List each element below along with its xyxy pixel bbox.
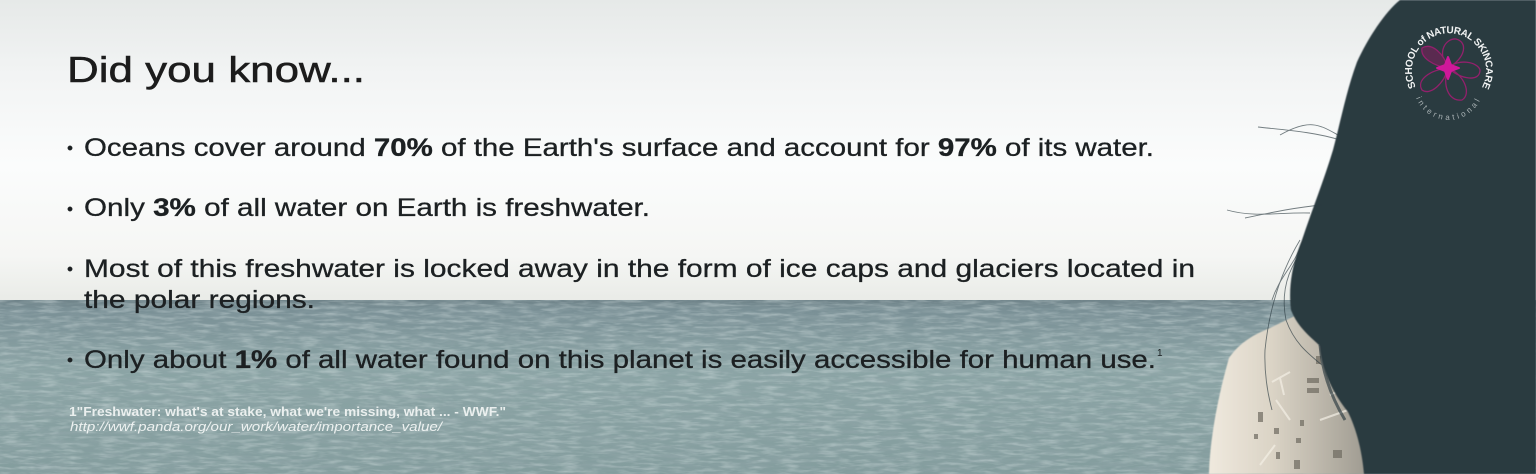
background: sea — [0, 300, 1536, 474]
bullet 3: the polar regions. — [84, 286, 315, 314]
footnote url: http://wwf.panda.org/our_work/water/importance_value/ — [70, 419, 444, 434]
hair — [1290, 0, 1536, 474]
logo international text: international — [1416, 96, 1480, 120]
stray hair strands — [1227, 125, 1345, 420]
bullet 4: Only about 1% of all water found on this planet is easily accessible for human use. — [84, 346, 1156, 374]
bullet 3 — [68, 255, 1195, 314]
title: Did you know... — [67, 49, 365, 90]
logo ring text: SCHOOL of NATURAL SKINCARE — [1405, 26, 1493, 90]
bullet list — [68, 134, 1195, 374]
bullet 2: Only 3% of all water on Earth is freshwater. — [84, 194, 650, 222]
bullet 1: Oceans cover around 70% of the Earth's surface and account for 97% of its water. — [84, 134, 1154, 162]
figure: woman seen from behind — [1208, 0, 1536, 474]
background: sky — [0, 0, 1536, 301]
bullet 3: Most of this freshwater is locked away in the form of ice caps and glaciers located in — [84, 255, 1195, 283]
footnote — [69, 404, 506, 434]
logo flower — [1421, 39, 1480, 100]
footnote citation: 1"Freshwater: what's at stake, what we're missing, what ... - WWF." — [69, 404, 506, 419]
bullet 4: 1 — [1157, 348, 1163, 359]
blouse — [1209, 310, 1365, 474]
logo: school of natural skincare — [1405, 26, 1493, 120]
